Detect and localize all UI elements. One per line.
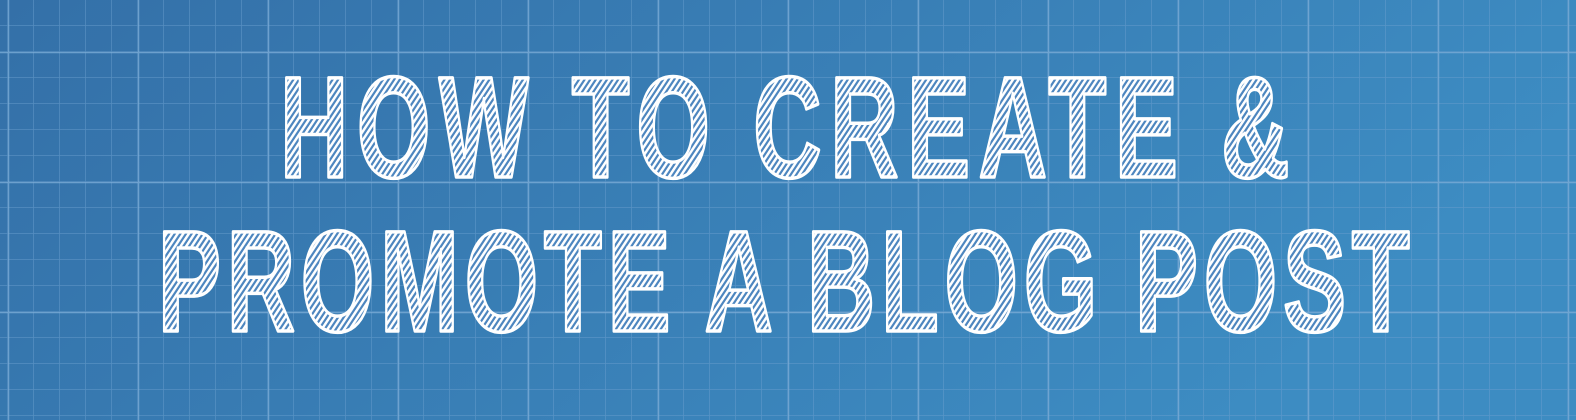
title line 2: PROMOTE A BLOG POST [158, 201, 1410, 362]
title line 1: HOW TO CREATE & [280, 47, 1290, 208]
title [158, 47, 1410, 362]
